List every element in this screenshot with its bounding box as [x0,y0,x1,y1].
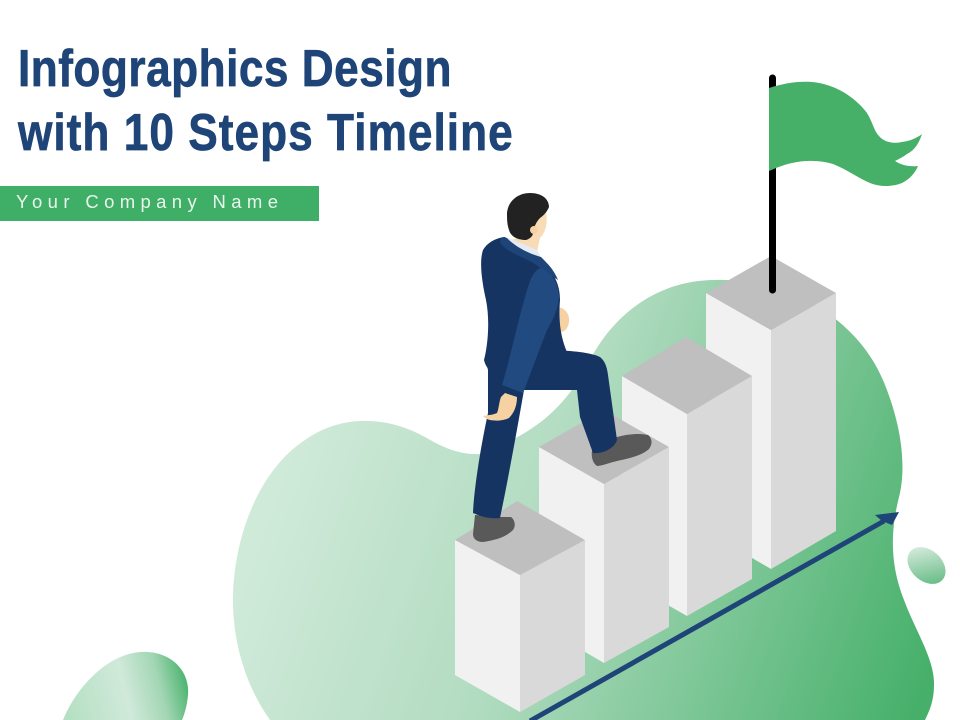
flag pole [769,78,776,290]
title line 2: with 10 Steps Timeline [17,104,513,162]
jacket sleeve [502,268,559,393]
jacket [481,237,567,388]
jacket collar [500,237,558,280]
title line 1: Infographics Design [18,40,452,98]
growth arrow [530,512,899,720]
shirt collar [506,237,541,257]
bar 1 [455,501,585,712]
flag pole base [769,256,776,290]
small blob: right [900,540,953,591]
title [17,40,513,162]
small blob: bottom left [63,652,188,720]
trousers [473,350,617,518]
flag cloth [769,82,922,186]
bar 2 [539,410,669,663]
flag [769,78,922,290]
company name text: Your Company Name [16,191,278,212]
background green blob [233,280,934,720]
far hand [558,307,569,332]
near hand [483,393,517,421]
hair [507,193,549,240]
company name band [0,186,319,221]
bar 4 [706,256,836,569]
bar 3 [622,337,752,616]
shoe: front foot [592,434,652,466]
neck and face [510,212,547,252]
businessman [473,193,652,542]
shoe: back foot [473,515,515,542]
ear [530,226,538,234]
